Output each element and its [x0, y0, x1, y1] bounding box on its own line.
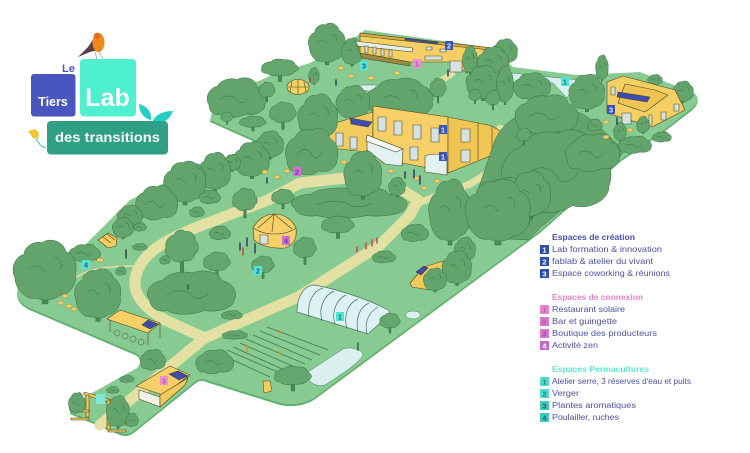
map badges: permaculture — [82, 61, 569, 404]
map badges: connexion: 4 — [284, 236, 289, 246]
legend: espaces de connexion: 3 — [542, 330, 547, 338]
pond: beside greenhouse — [406, 311, 420, 319]
logo: Lab box: Lab — [85, 84, 130, 112]
greenhouse — [297, 285, 390, 334]
legend: espaces permacultures: Atelier serre, 3 réserves d'eau et puits — [552, 376, 691, 386]
legend: espaces de connexion: 1 — [542, 306, 547, 314]
map badges: permaculture: 3 — [362, 62, 366, 70]
legend: espaces de connexion — [540, 292, 657, 350]
trees: right forest — [429, 46, 671, 245]
ground accents: rows of crops — [222, 327, 328, 377]
map badges: creation — [439, 41, 615, 162]
wheelbarrow — [263, 381, 272, 393]
trees: main mid-ground — [13, 94, 475, 429]
legend: espaces permacultures: 3 — [542, 402, 547, 410]
building: espace fablab (top) — [355, 33, 493, 73]
map badges: connexion: 3 — [162, 376, 166, 386]
logo: Le: Le — [62, 63, 75, 75]
map badges: permaculture: 1 — [338, 312, 342, 322]
pond: near main building — [340, 85, 377, 93]
legend: espaces permacultures: 2 — [542, 390, 547, 398]
legend: espaces permacultures: 4 — [542, 414, 547, 422]
building: shop — [136, 366, 190, 407]
sandy paths — [77, 74, 522, 425]
legend: espaces de connexion: Bar et guingette — [552, 316, 617, 326]
forest canopy mass — [478, 108, 624, 240]
legend: espaces permacultures: 1 — [542, 378, 547, 386]
legend: espaces de creation: Espaces de création — [552, 232, 635, 242]
legend: espaces permacultures — [540, 364, 691, 422]
legend: espaces de connexion: 2 — [542, 318, 547, 326]
legend: espaces de creation: 3 — [542, 270, 547, 278]
trees: back row top — [207, 23, 693, 131]
map badges: creation: 2 — [447, 42, 451, 50]
legend: espaces de connexion: Boutique des producteurs — [552, 328, 657, 338]
pergola with bikes — [107, 310, 160, 345]
legend: espaces de creation: 2 — [542, 258, 547, 266]
map badges: creation: 1 — [441, 126, 445, 134]
small house in the trees — [410, 261, 445, 290]
windows — [336, 117, 505, 162]
legend: espaces de creation: 1 — [542, 246, 547, 254]
logo: Tiers box: Tiers — [38, 95, 68, 109]
building: main lab — [328, 106, 510, 175]
veranda — [367, 135, 403, 166]
legend: espaces de connexion: Espaces de connexion — [552, 292, 643, 302]
pond: lower reserve — [307, 348, 363, 386]
shed: henhouse — [98, 233, 117, 248]
legend: espaces permacultures: Verger — [552, 388, 579, 398]
yurt (small dome) — [287, 80, 309, 94]
ponds — [307, 73, 578, 386]
legend: espaces de creation: Espace coworking & réunions — [552, 268, 670, 278]
map badges: connexion: 1 — [415, 60, 419, 68]
pond: top reserve — [512, 73, 578, 98]
legend: espaces permacultures: Plantes aromatiques — [552, 400, 636, 410]
map badges: creation: 1 — [441, 152, 445, 162]
legend: espaces de connexion: Restaurant solaire — [552, 304, 625, 314]
legend: espaces permacultures: Poulailler, ruches — [552, 412, 619, 422]
logo: des transitions box: des transitions — [55, 130, 160, 145]
legend: espaces de creation — [540, 232, 670, 278]
map badges: connexion — [160, 59, 421, 386]
map badges: permaculture: 1 — [563, 78, 567, 86]
legend: espaces de connexion: Activité zen — [552, 340, 598, 350]
entrance gate — [71, 392, 126, 432]
logo: Tiers box — [31, 74, 76, 116]
logo: flower — [28, 129, 46, 148]
logo: des transitions box — [47, 121, 168, 154]
map badges: permaculture: 4 — [84, 260, 89, 270]
legend: espaces de creation: Lab formation & innovation — [552, 244, 662, 254]
map badges: connexion: 2 — [295, 168, 299, 176]
logo: robin — [78, 33, 104, 59]
yurt: zen activity — [253, 214, 296, 248]
legend: espaces de connexion: 4 — [542, 342, 547, 350]
logo: leaves — [139, 104, 173, 123]
building: coworking — [607, 76, 685, 127]
legend: espaces permacultures: Espaces Permacultures — [552, 364, 649, 374]
cafe tables and visitors — [58, 66, 633, 355]
map badges: creation: 3 — [609, 106, 613, 114]
round glass extension — [425, 154, 447, 175]
legend: espaces de creation: fablab & atelier du vivant — [552, 256, 654, 266]
logo — [28, 33, 173, 154]
map badges: permaculture: 2 — [256, 266, 260, 276]
logo: Lab box — [80, 59, 136, 116]
